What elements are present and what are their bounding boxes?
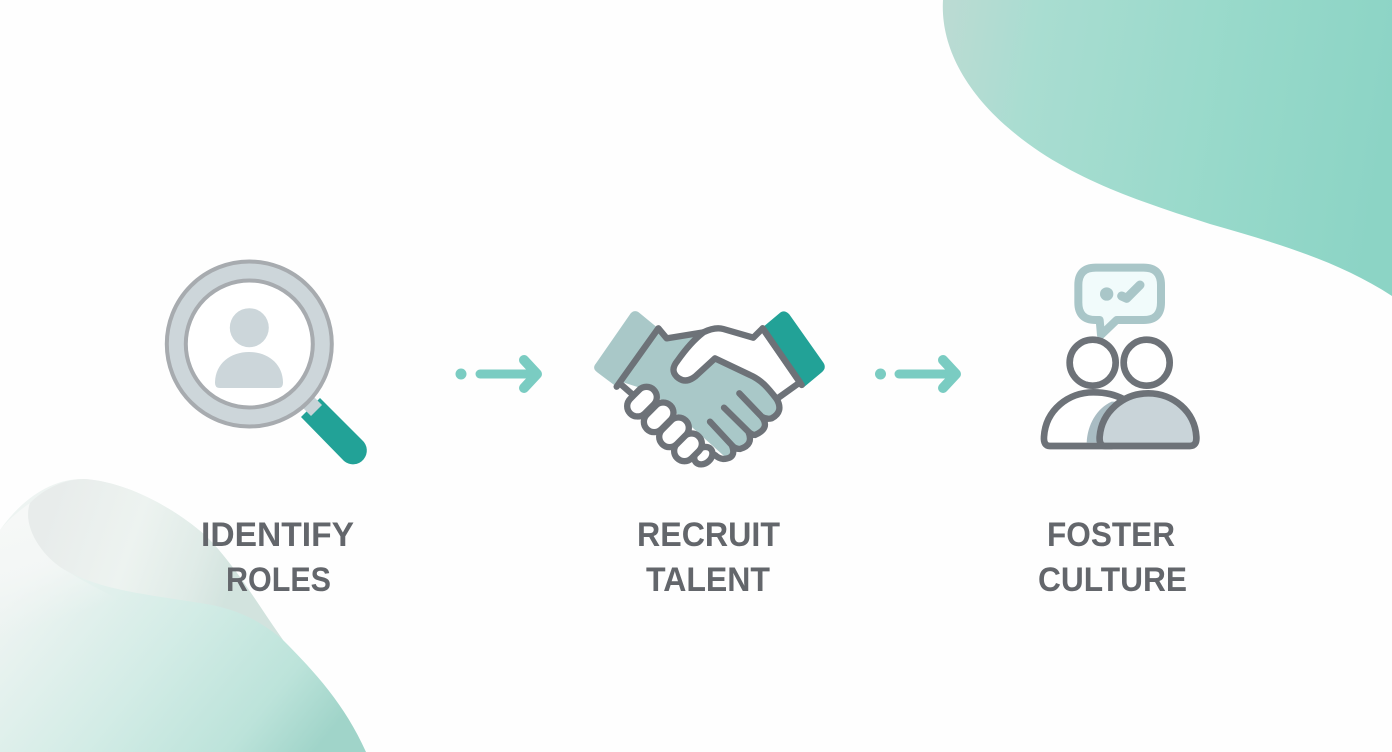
right person head	[1124, 340, 1170, 386]
label: identify roles: ROLES	[226, 561, 331, 599]
bubble check	[1122, 285, 1140, 298]
person head	[230, 308, 269, 347]
left cuff	[594, 311, 657, 386]
magnifier lens ring	[175, 270, 323, 418]
label: foster culture	[1038, 516, 1187, 599]
icon: handshake	[594, 311, 825, 468]
left hand	[623, 328, 779, 458]
decorative blob: bottom left	[0, 479, 366, 752]
arrow: recruit to foster	[875, 360, 956, 388]
finger lines	[710, 393, 779, 459]
label: recruit talent	[637, 516, 780, 599]
arrow: identify to recruit	[456, 360, 537, 388]
body shadow	[1087, 402, 1122, 443]
magnifier handle	[301, 398, 367, 464]
label: foster culture: FOSTER	[1047, 516, 1175, 554]
decorative blob: top right	[943, 0, 1392, 296]
icon: two people with speech bubble	[1044, 268, 1196, 446]
label: recruit talent: TALENT	[646, 561, 770, 599]
magnifier inner edge	[186, 280, 313, 408]
left hand top edge	[658, 328, 703, 338]
icon: magnifying glass with person	[167, 262, 367, 464]
magnifier outer edge	[167, 262, 332, 426]
right hand	[673, 328, 800, 399]
left person body	[1044, 392, 1123, 446]
right person body	[1100, 393, 1196, 446]
magnifier neck	[303, 397, 322, 416]
knuckles	[623, 383, 716, 468]
right cuff	[763, 311, 825, 388]
bubble dot	[1100, 287, 1113, 301]
label: identify roles	[201, 516, 354, 599]
speech bubble	[1078, 268, 1161, 335]
left person head	[1070, 340, 1116, 386]
label: identify roles: IDENTIFY	[201, 516, 354, 554]
cuff lines	[617, 328, 802, 397]
person body	[215, 352, 283, 388]
label: foster culture: CULTURE	[1038, 561, 1187, 599]
label: recruit talent: RECRUIT	[637, 516, 780, 554]
